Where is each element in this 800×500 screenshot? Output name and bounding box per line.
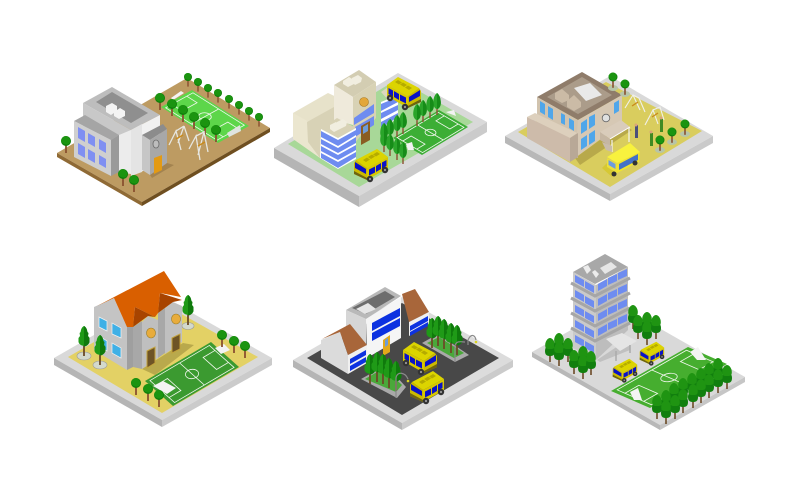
front blue tower — [321, 118, 356, 138]
planter 2 — [422, 316, 469, 362]
goals — [406, 110, 456, 150]
entrance canopy — [597, 333, 637, 362]
central block — [346, 287, 401, 358]
scene 3: brown school with yellow bus — [505, 72, 713, 201]
plot base — [532, 304, 745, 430]
rear blue tower — [381, 87, 398, 102]
planter 1 — [361, 352, 406, 398]
bus lower — [410, 371, 444, 404]
blue windows — [372, 308, 400, 341]
plot base — [57, 78, 270, 206]
scene 1: grey school on brown plot — [57, 73, 270, 206]
scene 5: school with asphalt parking — [293, 287, 513, 430]
round trees — [131, 330, 250, 407]
trees — [608, 72, 690, 153]
roof hatch — [356, 303, 376, 314]
building shadow — [150, 163, 174, 178]
foreground trees — [61, 136, 139, 192]
firs with round planters — [77, 295, 194, 369]
plot base — [293, 297, 513, 430]
lamp 2 — [455, 335, 477, 362]
goals — [153, 344, 230, 394]
plot base — [274, 73, 487, 207]
football field — [145, 342, 239, 406]
people — [634, 116, 663, 146]
main orange roof — [97, 271, 181, 327]
clock — [153, 140, 159, 148]
football field — [161, 90, 249, 143]
swings — [169, 126, 208, 160]
trees right row — [652, 358, 732, 424]
scene 2: beige school with buses — [274, 70, 487, 207]
plot base — [54, 296, 272, 427]
building shadow — [575, 124, 632, 165]
upper bus — [387, 77, 421, 110]
football field — [611, 347, 727, 408]
right wing — [402, 289, 429, 336]
clock — [360, 98, 368, 106]
pine trees — [380, 93, 441, 164]
building shadow — [142, 343, 194, 375]
porch — [600, 120, 630, 139]
tower — [571, 254, 630, 360]
front row of trees — [155, 93, 221, 142]
bus upper — [403, 342, 437, 375]
goals — [171, 91, 241, 137]
goals — [630, 347, 706, 400]
buses — [613, 359, 637, 383]
building — [74, 87, 167, 176]
windows — [99, 317, 121, 358]
left wing — [321, 324, 367, 374]
roof boxes — [555, 89, 569, 103]
school bus — [602, 143, 640, 177]
plot base — [505, 76, 713, 201]
floors: windows — [575, 269, 627, 353]
door — [361, 121, 370, 145]
windows — [78, 127, 106, 168]
clock — [602, 114, 610, 122]
football field — [393, 110, 468, 155]
trees behind — [628, 305, 661, 345]
door — [383, 335, 390, 356]
clocks — [146, 328, 156, 338]
swings — [625, 95, 664, 125]
scene 4: orange roof school — [54, 271, 272, 427]
building — [94, 271, 182, 370]
scene 6: tower school with field — [532, 254, 745, 430]
doors — [147, 347, 155, 368]
building — [527, 72, 630, 162]
windows — [540, 100, 619, 150]
lower bus — [354, 149, 388, 182]
door — [154, 155, 162, 174]
back row of trees — [184, 73, 263, 127]
trees left cluster — [545, 333, 596, 379]
roof gables — [133, 307, 155, 327]
ledges — [571, 278, 630, 341]
building — [293, 70, 398, 169]
lamp 1 — [396, 373, 409, 398]
